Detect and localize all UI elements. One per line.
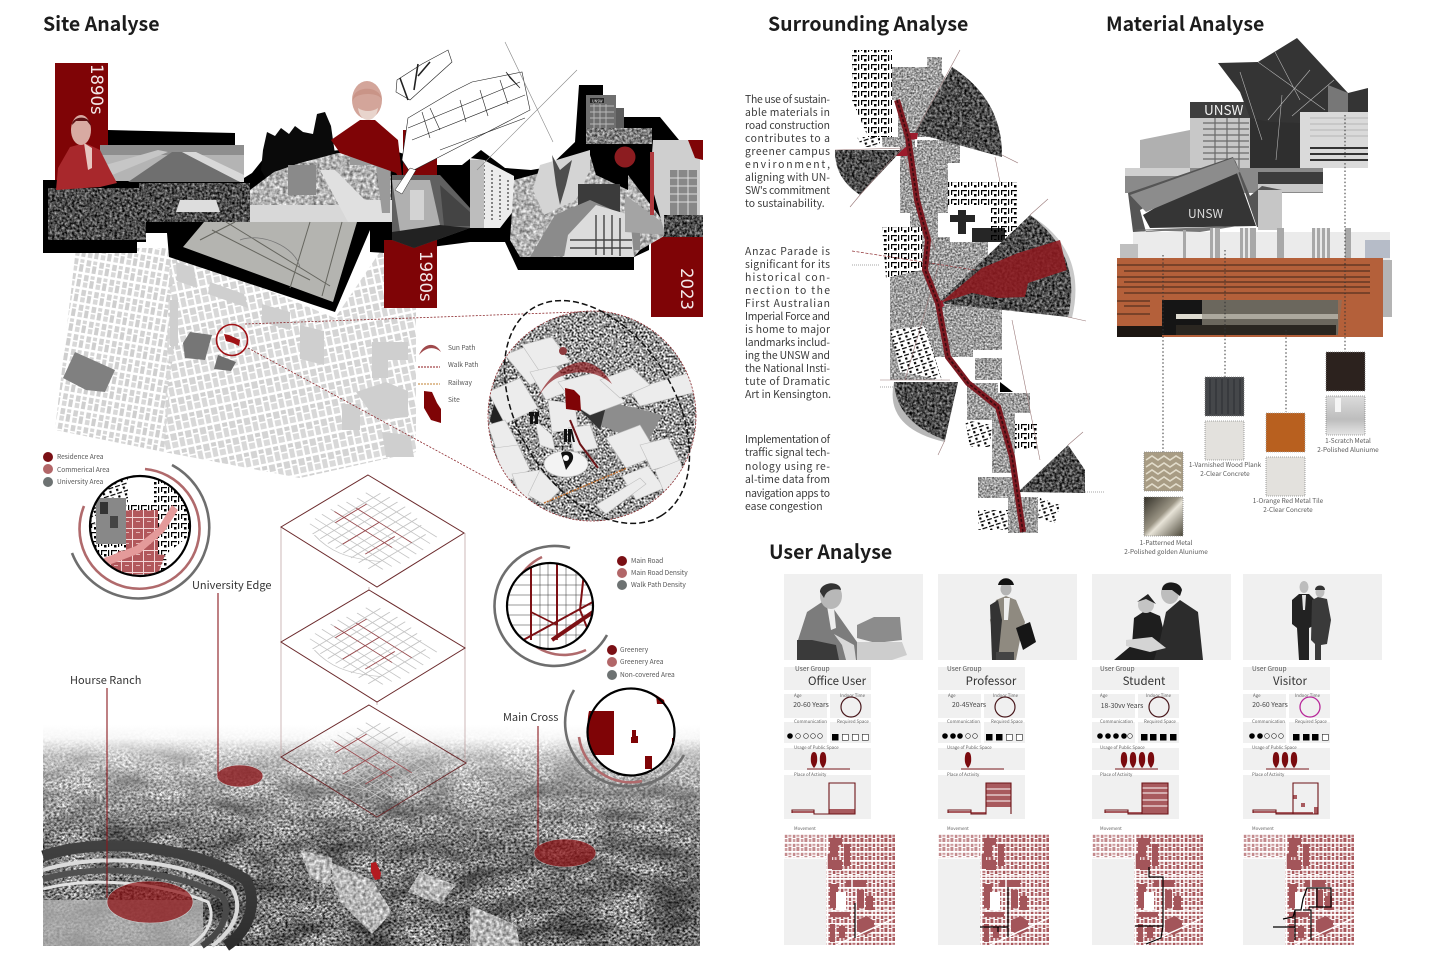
photo: shop front	[392, 175, 470, 248]
usage of public space: Usage of Public Space	[1252, 744, 1297, 751]
photo: meeting	[139, 183, 250, 222]
panel: grey figure-ground map	[55, 240, 416, 478]
material swatch: wood plank	[1205, 377, 1244, 416]
place of activity	[792, 771, 855, 814]
labels: scratch metal: 1-Scratch Metal	[1325, 436, 1371, 445]
labels: patterned metal	[1124, 538, 1208, 556]
portrait: bearded man	[331, 81, 403, 185]
UNSW tower: UNSW	[1204, 99, 1244, 119]
user group: Visitor	[1273, 673, 1307, 689]
legend: greenery: Non-covered Area	[620, 669, 675, 679]
text: Anzac Parade	[745, 243, 831, 401]
place of activity: Place of Activity	[947, 771, 980, 778]
photo: historic map	[183, 222, 357, 302]
legend: roads: Walk Path Density	[631, 579, 686, 589]
text: Anzac Parade: significant for its	[745, 256, 830, 271]
required space	[832, 718, 869, 740]
diagram: University Edge circle	[72, 465, 209, 598]
sector: campus	[938, 215, 1071, 317]
text: Anzac Parade: landmarks includ-	[745, 334, 830, 349]
photo: professor	[938, 574, 1077, 660]
indoor time	[840, 692, 866, 717]
atrium	[1250, 117, 1300, 168]
dashed red clip outline	[488, 311, 696, 521]
text: Anzac Parade: Imperial Force and	[745, 308, 830, 323]
icon: restaurant	[529, 412, 539, 424]
layer: middle rhombus	[281, 590, 465, 702]
movement: Movement	[1252, 826, 1274, 832]
ledge	[1125, 168, 1323, 193]
text: sustainable materials: SW's commitment	[745, 182, 830, 197]
required space: Required Space	[991, 718, 1023, 725]
panel: history collage	[43, 42, 703, 317]
date bar: 1890s	[55, 63, 108, 180]
wedge pavilion: UNSW	[1188, 205, 1223, 222]
age	[793, 693, 829, 709]
legend: roads: Main Road Density	[631, 567, 688, 577]
labels: patterned metal: 1-Patterned Metal	[1140, 538, 1193, 547]
site marker in aerial	[371, 862, 381, 880]
user group: User Group	[1252, 663, 1287, 673]
communication: Communication	[947, 718, 980, 725]
legend: greenery	[607, 644, 675, 680]
legend: site symbols: Railway	[448, 377, 472, 387]
legend: site symbols: Walk Path	[448, 359, 478, 369]
legend: greenery: Greenery Area	[620, 656, 664, 666]
text: traffic signal: ease congestion	[745, 498, 823, 513]
text: sustainable materials	[745, 91, 830, 210]
required space	[986, 718, 1023, 740]
user group: User Group	[947, 663, 982, 673]
label: Main Cross: Main Cross	[503, 709, 558, 725]
icon: sun path	[419, 345, 441, 355]
place of activity: Place of Activity	[1100, 771, 1133, 778]
text: Anzac Parade: ing the UNSW and	[745, 347, 830, 362]
panel: user card Student	[1092, 574, 1231, 945]
age: 20-45Years	[952, 699, 986, 709]
movement	[938, 826, 1049, 945]
photo: couple	[1243, 574, 1382, 660]
legend: greenery: Greenery	[620, 644, 649, 654]
photo: campus plaza	[250, 152, 392, 222]
communication	[787, 718, 827, 739]
highlight: Main Cross	[534, 839, 596, 867]
movement: Movement	[794, 826, 816, 832]
text: sustainable materials: The use of sustain-	[745, 91, 830, 106]
legend: land use	[43, 451, 110, 487]
photo: UNSW tower	[586, 95, 652, 144]
date bar: 1890s: 1890s	[87, 64, 106, 115]
leader line: Hourse Ranch	[106, 688, 108, 898]
sight lines	[835, 50, 1086, 460]
text: traffic signal: nology using re-	[745, 458, 830, 473]
text: sustainable materials: aligning with UN-	[745, 169, 830, 184]
leader line: Main Cross	[537, 726, 539, 852]
indoor time	[1295, 692, 1321, 717]
callout: site circle	[216, 324, 248, 356]
red backing panel	[403, 130, 437, 220]
campus highlight	[940, 240, 1067, 303]
icon: sun path arc	[538, 362, 612, 397]
usage of public space	[794, 744, 839, 768]
white notch	[973, 350, 1002, 358]
material swatch: clear concrete 1	[1205, 421, 1244, 460]
indoor time	[1146, 692, 1172, 717]
icon: sun	[559, 347, 567, 355]
photo: students	[1092, 574, 1231, 660]
leader line: University Edge	[217, 593, 219, 776]
place of activity	[1100, 771, 1168, 814]
legend: land use: Residence Area	[57, 451, 104, 461]
text: Anzac Parade: historical con-	[745, 269, 830, 284]
heading: Surrounding Analyse: Surrounding Analyse	[768, 8, 968, 37]
place of activity	[947, 771, 1011, 814]
text: traffic signal: al-time data from	[745, 471, 830, 486]
site block	[565, 388, 581, 411]
text: sustainable materials: environment,	[745, 156, 830, 171]
user group	[795, 663, 867, 689]
black backing band	[43, 85, 700, 312]
movement: Movement	[1100, 826, 1122, 832]
sector halos	[1030, 215, 1075, 318]
photo: UNSW tower: UNSW	[592, 100, 603, 104]
text: traffic signal: Implementation of	[745, 431, 831, 446]
low left building	[1140, 130, 1190, 168]
communication	[942, 718, 980, 739]
labels: scratch metal: 2-Polished Aluniume	[1317, 445, 1379, 454]
text: Anzac Parade: Art in Kensington.	[745, 386, 831, 401]
labels: orange tile	[1253, 496, 1324, 514]
panelled facade	[1300, 112, 1368, 168]
Anzac Parade road	[897, 100, 1023, 532]
age: Age	[948, 693, 956, 699]
layer connectors	[281, 527, 465, 763]
diagram: road circle	[494, 546, 607, 666]
label: University Edge: University Edge	[192, 577, 272, 593]
roof	[1218, 38, 1368, 123]
labels: wood plank: 2-Clear Concrete	[1200, 469, 1250, 478]
material swatch: patterned metal	[1144, 452, 1183, 491]
text: sustainable materials: greener campus	[745, 143, 830, 158]
age: Age	[794, 693, 802, 699]
label: Hourse Ranch: Hourse Ranch	[70, 672, 141, 688]
legend: land use: University Area	[57, 476, 104, 486]
heading: Material Analyse: Material Analyse	[1106, 8, 1264, 37]
photo: office worker	[784, 574, 923, 660]
user group: User Group	[795, 663, 830, 673]
orange facade	[1117, 258, 1383, 337]
communication: Communication	[1252, 718, 1285, 725]
text: Anzac Parade: Anzac Parade is	[745, 243, 830, 258]
panel: user card Professor	[938, 574, 1077, 945]
indoor time: Indoor Time	[840, 692, 866, 699]
usage of public space: Usage of Public Space	[947, 744, 992, 751]
panel: user card Office User	[784, 574, 923, 945]
icon: library	[564, 429, 575, 442]
indoor time: Indoor Time	[993, 692, 1019, 699]
photo: right building	[650, 140, 703, 237]
required space: Required Space	[837, 718, 869, 725]
age: Age	[1100, 693, 1108, 699]
icon: site	[424, 391, 441, 423]
user group: User Group	[1100, 663, 1135, 673]
wedge pavilion	[1128, 157, 1282, 232]
date bar: 2023	[651, 237, 703, 317]
walk path	[570, 420, 598, 468]
age: Age	[1253, 693, 1261, 699]
text: sustainable materials: road construction	[745, 117, 830, 132]
text: Anzac Parade: the National Insti-	[745, 360, 830, 375]
dark block: south campus	[214, 355, 236, 371]
user group: Student	[1123, 673, 1166, 689]
text: sustainable materials: contributes to a	[745, 130, 830, 145]
layer: top rhombus	[281, 475, 464, 587]
legend: site symbols: Sun Path	[448, 342, 475, 352]
communication: Communication	[1100, 718, 1133, 725]
layer: bottom rhombus	[281, 705, 466, 817]
side wall	[1383, 260, 1392, 317]
age	[1100, 693, 1143, 710]
labels: wood plank	[1189, 460, 1262, 478]
required space: Required Space	[1295, 718, 1327, 725]
icon: railway	[418, 383, 440, 385]
photo: central collage	[510, 150, 666, 257]
material swatch: polished golden aluminium	[1144, 497, 1183, 536]
fog gradient	[43, 725, 700, 947]
grey urban corridor	[882, 57, 1038, 533]
date bar: 2023: 2023	[677, 268, 696, 310]
user group: Professor	[966, 673, 1017, 689]
communication	[1097, 718, 1133, 739]
plant band	[1120, 226, 1390, 260]
place of activity: Place of Activity	[794, 771, 827, 778]
legend: site symbols: Site	[448, 394, 460, 404]
material swatch: orange metal tile	[1266, 413, 1305, 452]
photo: road	[100, 145, 244, 182]
user group	[1252, 663, 1307, 689]
sector: west park	[835, 150, 902, 195]
labels: wood plank: 1-Varnished Wood Plank	[1189, 460, 1262, 469]
movement	[1243, 826, 1354, 945]
material swatch: scratch metal	[1326, 352, 1365, 391]
movement	[784, 826, 895, 945]
usage of public space: Usage of Public Space	[794, 744, 839, 751]
text: traffic signal	[745, 431, 831, 513]
labels: scratch metal	[1317, 436, 1379, 454]
indoor time: Indoor Time	[1295, 692, 1321, 699]
date bar: 1980s: 1980s	[416, 251, 435, 302]
campus buildings in aerial	[300, 850, 520, 946]
railway	[544, 468, 627, 503]
UNSW tower	[1190, 99, 1257, 168]
labels: patterned metal: 2-Polished golden Aluniume	[1124, 547, 1208, 556]
date bar: 1980s	[384, 240, 437, 308]
aerial photograph	[43, 725, 700, 947]
age	[1252, 693, 1288, 709]
callout: connector lines	[245, 311, 605, 497]
portrait: red toned man	[56, 115, 117, 190]
usage of public space	[1252, 744, 1297, 768]
text: Anzac Parade: is home to major	[745, 321, 831, 336]
text: traffic signal: traffic signal tech-	[745, 444, 830, 459]
age: 18-30vv Years	[1101, 700, 1143, 710]
junction markers	[896, 133, 944, 310]
indoor time	[993, 692, 1019, 717]
labels: orange tile: 2-Clear Concrete	[1263, 505, 1313, 514]
diagram: greenery circle	[565, 688, 684, 786]
dotted leader lines	[1163, 115, 1345, 452]
usage of public space	[1100, 744, 1154, 768]
sector: north east park	[915, 67, 1002, 157]
line drawing: architectural sketch	[395, 42, 577, 194]
exploded isometric layers	[281, 475, 466, 817]
age	[948, 693, 986, 709]
usage of public space	[947, 744, 992, 768]
required space	[1141, 718, 1176, 740]
black dashed lens	[466, 267, 728, 557]
text: Anzac Parade: tute of Dramatic	[745, 373, 830, 388]
communication	[1249, 718, 1285, 739]
text: sustainable materials: to sustainability.	[745, 195, 825, 210]
highlight: University Edge	[217, 765, 263, 787]
text: Anzac Parade: First Australian	[745, 295, 830, 310]
user group	[947, 663, 1017, 689]
collage: material buildings	[1117, 38, 1392, 337]
photo: ground	[48, 188, 146, 240]
icon: walk path	[418, 366, 440, 368]
silhouettes	[261, 112, 335, 184]
icon: map pin	[561, 451, 573, 470]
movement: Movement	[947, 826, 969, 832]
legend: site symbols	[418, 342, 478, 423]
user group: Office User	[808, 673, 867, 689]
text: traffic signal: navigation apps to	[745, 485, 830, 500]
required space	[1293, 718, 1328, 740]
sector: south east	[1018, 445, 1085, 493]
legend: land use: Commerical Area	[57, 464, 110, 474]
communication: Communication	[794, 718, 827, 725]
black and white fabric pieces	[852, 50, 892, 137]
panel: aerial circle view	[488, 300, 696, 524]
movement	[1092, 826, 1203, 945]
heading: User Analyse: User Analyse	[769, 536, 892, 565]
panel: user card Visitor	[1243, 574, 1382, 945]
map: Anzac Parade corridor	[835, 50, 1104, 533]
photo: slab block	[470, 158, 514, 228]
3D massing blocks	[488, 337, 696, 514]
red stamp circle	[614, 146, 636, 168]
usage of public space: Usage of Public Space	[1100, 744, 1145, 751]
heading: Site Analyse: Site Analyse	[43, 8, 160, 37]
place of activity	[1252, 771, 1318, 814]
racecourse	[43, 846, 252, 946]
age: 20-60 Years	[1252, 699, 1288, 709]
required space: Required Space	[1144, 718, 1176, 725]
material swatch: clear concrete 2	[1266, 457, 1305, 496]
material swatch: polished aluminium	[1326, 396, 1365, 435]
indoor time: Indoor Time	[1146, 692, 1172, 699]
place of activity: Place of Activity	[1252, 771, 1285, 778]
labels: orange tile: 1-Orange Red Metal Tile	[1253, 496, 1324, 505]
text: sustainable materials: able materials in	[745, 104, 830, 119]
user group	[1100, 663, 1166, 689]
age: 20-60 Years	[793, 699, 829, 709]
legend: roads: Main Road	[631, 555, 663, 565]
text: Anzac Parade: nection to the	[745, 282, 830, 297]
dark block: oval park	[63, 352, 115, 392]
dark block: campus	[183, 332, 212, 360]
sector: south west park	[894, 382, 958, 440]
legend: roads	[617, 555, 688, 590]
highlight: Hourse Ranch	[107, 881, 193, 923]
